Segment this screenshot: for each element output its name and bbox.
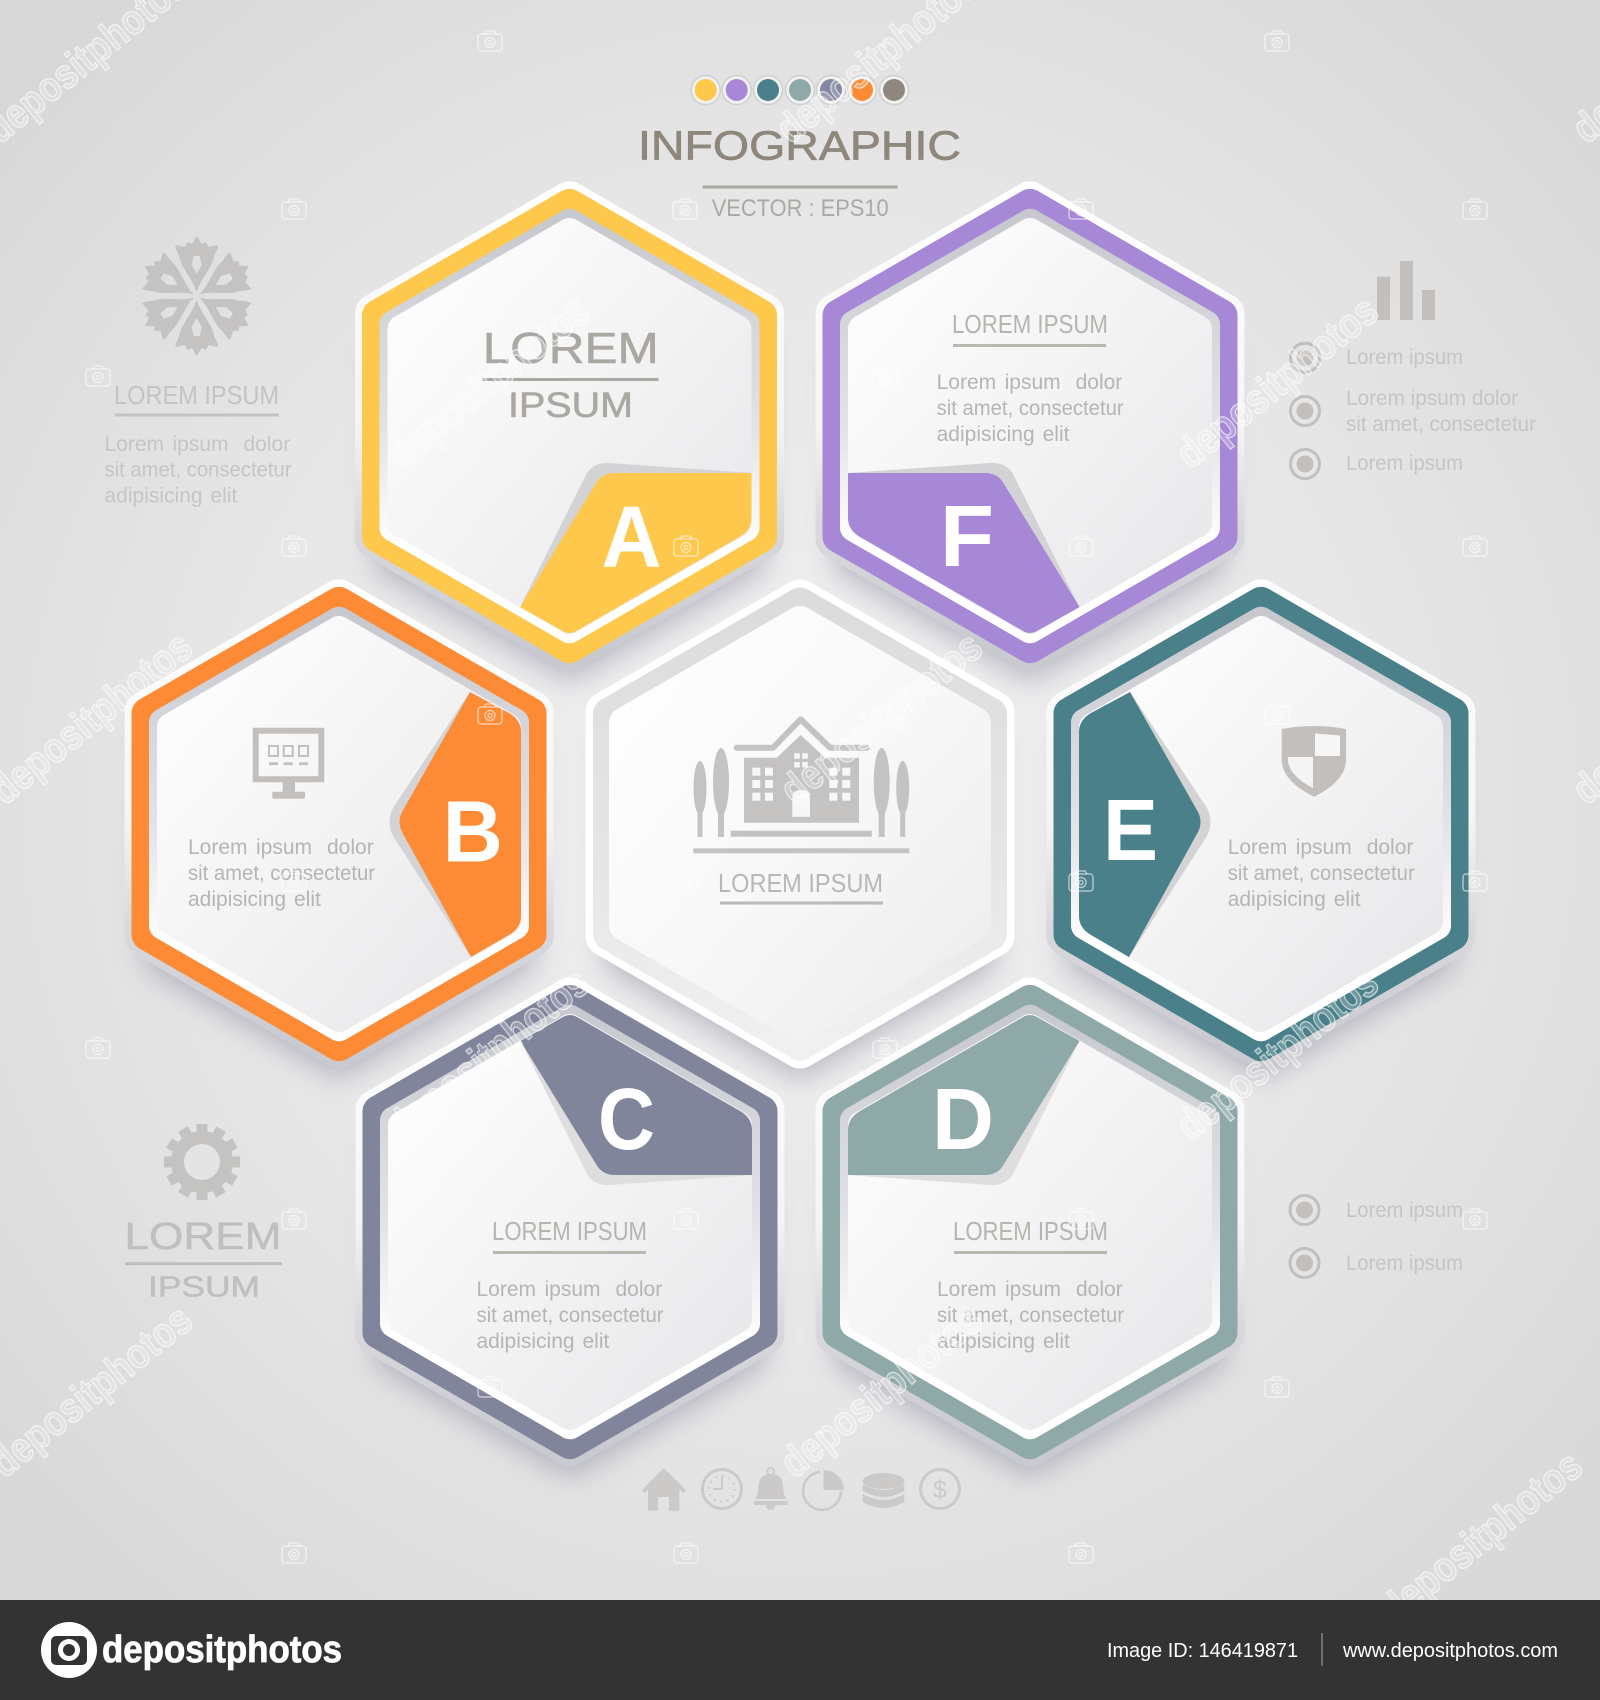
body text [937, 371, 1124, 446]
text block: left top: adipisicing [104, 485, 203, 508]
text block: left top: dolor [244, 433, 290, 456]
body text: Lorem [476, 1278, 536, 1301]
icon: bar chart [1377, 261, 1435, 320]
heading rule [720, 902, 883, 904]
tab E [1079, 692, 1200, 957]
body text: elit [582, 1330, 610, 1353]
body text: elit [1043, 423, 1070, 446]
icon: dollar [920, 1470, 960, 1508]
body text: ipsum [1296, 836, 1352, 859]
logo: camera badge [41, 1622, 97, 1678]
icon: pie chart [803, 1470, 844, 1510]
letter C: C [598, 1071, 655, 1168]
image id: Image ID: 146419871 [1107, 1640, 1298, 1662]
icon: bell [754, 1468, 788, 1510]
tab A [520, 473, 752, 633]
body text: sit amet, consectetur [188, 862, 375, 885]
panel: C slate hexagon [376, 997, 764, 1460]
body text: sit amet, consectetur [937, 1304, 1124, 1327]
body text: elit [1043, 1330, 1070, 1353]
letter E: E [1103, 782, 1158, 879]
subtitle: VECTOR : EPS10 [712, 195, 889, 222]
letter F: F [940, 488, 994, 585]
body text: dolor [1076, 371, 1122, 394]
tab F [848, 473, 1080, 633]
subtitle [703, 186, 898, 222]
panel: B orange hexagon [144, 599, 534, 1062]
list: right bottom: Lorem ipsum [1346, 1199, 1463, 1222]
letter A: A [602, 489, 662, 586]
icon: school building with trees [693, 719, 909, 853]
heading: LOREM IPSUM [953, 1216, 1108, 1246]
panel: E teal hexagon [1066, 599, 1456, 1062]
body text: adipisicing [188, 888, 286, 911]
body text: ipsum [1005, 1278, 1061, 1301]
body text [188, 836, 375, 911]
watermark camera marks [86, 31, 1487, 1563]
icon: dollar: $ [933, 1476, 947, 1504]
body text: sit amet, consectetur [476, 1304, 664, 1327]
body text: ipsum [256, 836, 312, 859]
heading: LOREM IPSUM [492, 1216, 647, 1246]
heading rule [954, 1251, 1107, 1254]
icon: shield [1282, 726, 1346, 797]
icon: flower ornament [134, 236, 259, 356]
panel: F purple hexagon [836, 201, 1224, 664]
body text: sit amet, consectetur [1228, 862, 1415, 885]
watermark text: depositphotos [378, 958, 598, 1149]
text block: left top: sit amet, consectetur [104, 459, 292, 482]
watermark text: depositphotos [1167, 958, 1387, 1149]
text block: left top: elit [210, 485, 238, 508]
heading rule [493, 1251, 646, 1254]
body text: dolor [327, 836, 374, 859]
tab C [520, 1015, 752, 1175]
panel: A yellow hexagon [375, 201, 764, 664]
body text: elit [294, 888, 321, 911]
body text: Lorem [937, 371, 996, 394]
icon row: bottom [642, 1468, 960, 1511]
list: right bottom [1290, 1196, 1463, 1278]
panel: centre hexagon [606, 599, 994, 1061]
body text: Lorem [1228, 836, 1287, 859]
body text: dolor [616, 1278, 662, 1301]
body text: dolor [1076, 1278, 1123, 1301]
watermark text: depositphotos [1167, 286, 1387, 477]
body text [937, 1278, 1124, 1353]
heading LOREM IPSUM [482, 324, 659, 425]
body text: adipisicing [937, 1330, 1035, 1353]
heading: LOREM IPSUM [952, 309, 1108, 339]
text block: left bottom LOREM IPSUM: LOREM [124, 1216, 282, 1258]
body text [476, 1278, 664, 1353]
list: right top: Lorem ipsum dolor [1346, 387, 1518, 410]
body text [1228, 836, 1415, 911]
heading rule [953, 344, 1106, 347]
text block: left top: ipsum [172, 433, 229, 456]
text block: left top [104, 380, 292, 508]
text block: left bottom LOREM IPSUM [124, 1216, 282, 1304]
icon: clock [702, 1470, 742, 1508]
body text: Lorem [937, 1278, 997, 1301]
title: INFOGRAPHIC [638, 122, 961, 168]
letter D: D [932, 1071, 994, 1168]
panel: D sage hexagon [836, 997, 1224, 1460]
body text: adipisicing [476, 1330, 575, 1353]
list: right top: sit amet, consectetur [1346, 413, 1536, 436]
list: right bottom: Lorem ipsum [1346, 1252, 1463, 1275]
watermark text: depositphotos [771, 622, 991, 813]
icon: monitor [253, 728, 324, 799]
body text: adipisicing [937, 423, 1035, 446]
icon: gear [164, 1124, 240, 1200]
body text: sit amet, consectetur [937, 397, 1124, 420]
text block: left bottom LOREM IPSUM: IPSUM [148, 1272, 260, 1304]
body text: adipisicing [1228, 888, 1326, 911]
tab B [400, 692, 521, 957]
heading: LOREM IPSUM [718, 868, 883, 898]
tab D [848, 1015, 1080, 1175]
colour dots row [691, 76, 908, 104]
footer bar [0, 1600, 1600, 1700]
body text: elit [1334, 888, 1361, 911]
text block: left top: Lorem [104, 433, 164, 456]
letter B: B [443, 784, 503, 881]
heading LOREM IPSUM: LOREM [483, 324, 659, 373]
watermark text: depositphotos [378, 286, 598, 477]
body text: Lorem [188, 836, 248, 859]
text block: left top: LOREM IPSUM [114, 380, 279, 410]
site url: www.depositphotos.com [1342, 1640, 1558, 1662]
heading LOREM IPSUM: IPSUM [508, 386, 633, 425]
logo wordmark: depositphotos [102, 1629, 342, 1671]
icon: house [642, 1468, 686, 1511]
list: right top: Lorem ipsum [1346, 452, 1463, 475]
list: right top: Lorem ipsum [1346, 346, 1463, 369]
icon: coins [863, 1473, 904, 1508]
watermark text: depositphotos [771, 1295, 991, 1486]
body text: dolor [1367, 836, 1413, 859]
list: right top [1290, 343, 1536, 478]
body text: ipsum [544, 1278, 601, 1301]
body text: ipsum [1005, 371, 1061, 394]
